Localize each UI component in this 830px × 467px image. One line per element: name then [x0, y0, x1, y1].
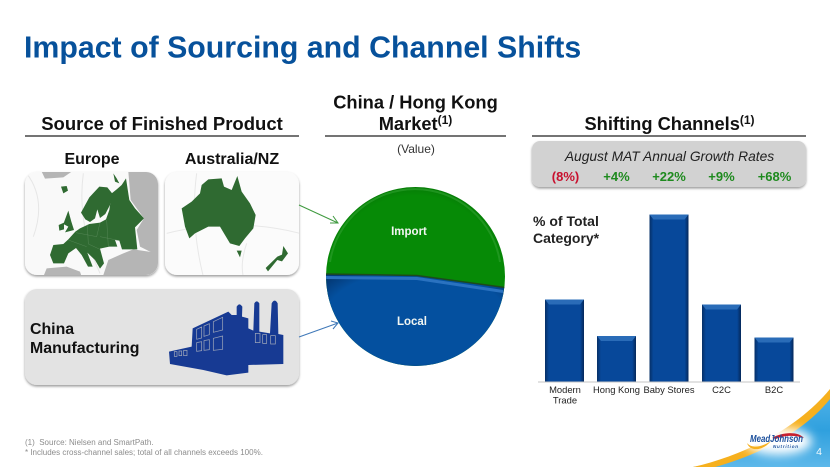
- axis labels: Baby Stores: [643, 384, 695, 395]
- label: Australia/NZ: Australia/NZ: [185, 151, 279, 168]
- label: Import: Import: [391, 226, 427, 238]
- heading: China / Hong Kong market: China / Hong Kong: [333, 92, 498, 112]
- panel: China manufacturing: [25, 289, 299, 385]
- axis labels: Modern: [549, 384, 581, 395]
- bar: Hong Kong: [597, 336, 636, 382]
- logo: Mead Johnson Nutrition: MeadJohnson: [750, 433, 803, 445]
- growth rates values: +22%: [652, 169, 686, 184]
- axis labels: Hong Kong: [593, 384, 640, 395]
- title: Impact of Sourcing and Channel Shifts: [24, 32, 581, 64]
- heading: shifting channels: Shifting Channels: [584, 113, 740, 134]
- footnotes: [25, 438, 263, 457]
- axis labels: B2C: [765, 384, 783, 395]
- bar: Modern Trade: [545, 300, 584, 382]
- heading: shifting channels: [532, 113, 806, 136]
- heading: shifting channels: (1): [740, 113, 755, 127]
- heading: source of finished product: Source of Finished Product: [41, 113, 283, 134]
- label: China Manufacturing: Manufacturing: [30, 340, 139, 357]
- axis labels: C2C: [712, 384, 731, 395]
- label: Europe: Europe: [64, 151, 120, 168]
- axis labels: Trade: [553, 394, 577, 406]
- heading: China / Hong Kong market: [325, 92, 506, 136]
- growth rates values: +9%: [708, 169, 735, 184]
- footnotes: * Includes cross-channel sales; total of all channels exceeds 100%.: [25, 448, 263, 457]
- panel: Europe map: [25, 172, 160, 277]
- pie chart: [326, 187, 505, 366]
- panel: growth rates: [532, 141, 806, 187]
- panel: Australia and New Zealand map: [165, 172, 300, 277]
- footer swoosh: [693, 389, 830, 467]
- arrow: blue: [299, 321, 338, 337]
- growth rates values: (8%): [552, 169, 579, 184]
- growth rates heading: August MAT Annual Growth Rates: [564, 149, 774, 164]
- arrow: green: [299, 205, 338, 223]
- growth rates values: [552, 169, 792, 184]
- page number: 4: [816, 446, 822, 458]
- footnotes: (1) Source: Nielsen and SmartPath.: [25, 438, 154, 447]
- bar: B2C: [754, 338, 794, 382]
- growth rates values: +4%: [603, 169, 630, 184]
- axis labels: [549, 384, 783, 406]
- label: percent of total category: Category*: [533, 230, 600, 246]
- logo: Mead Johnson Nutrition: Nutrition: [773, 444, 798, 449]
- bar: C2C: [702, 304, 741, 382]
- growth rates values: +68%: [758, 169, 792, 184]
- heading: China / Hong Kong market: (1): [438, 113, 452, 127]
- label: value: (Value): [397, 142, 435, 156]
- label: China Manufacturing: China: [30, 321, 74, 338]
- label: percent of total category: % of Total: [533, 213, 599, 229]
- bar: Baby Stores: [650, 214, 688, 382]
- bar chart: [538, 214, 800, 406]
- heading: China / Hong Kong market: Market: [379, 113, 438, 134]
- icon: factory: [169, 301, 283, 375]
- logo: Mead Johnson Nutrition: [747, 433, 804, 449]
- label: Local: Local: [397, 316, 427, 328]
